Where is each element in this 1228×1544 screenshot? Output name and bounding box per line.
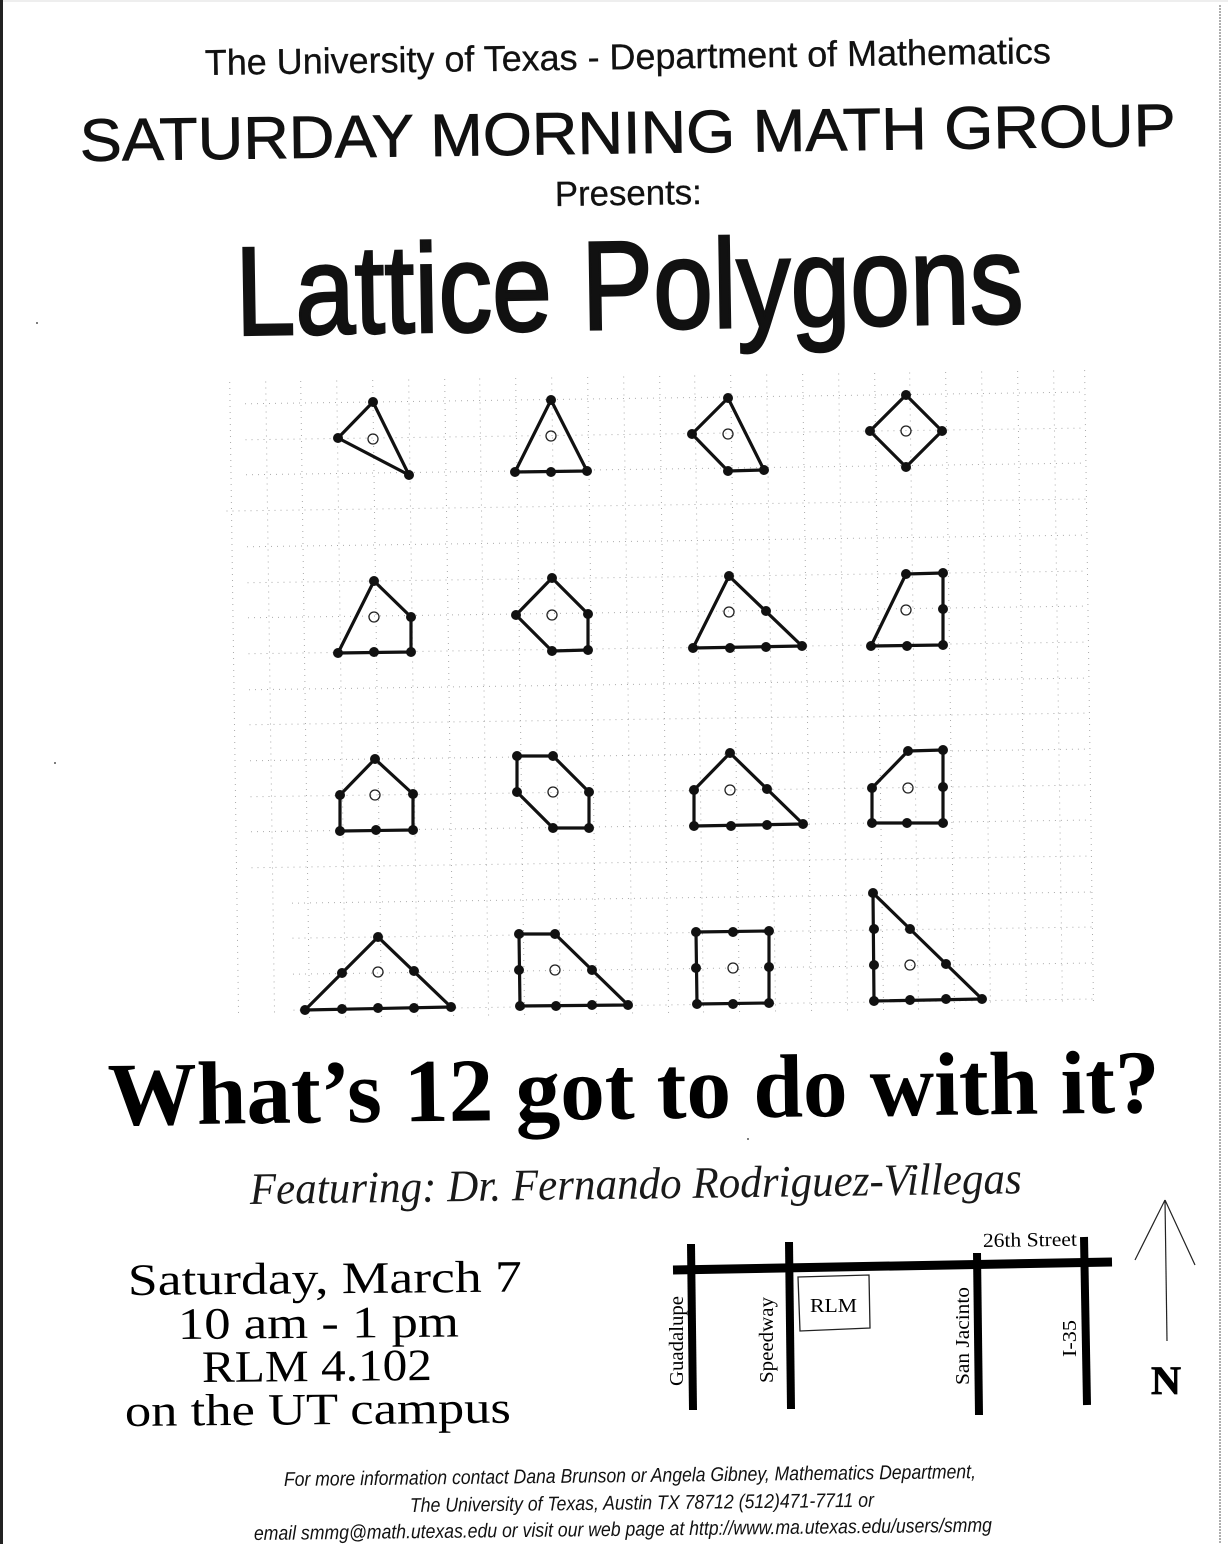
polygon 2 xyxy=(510,395,592,477)
polygon 3 xyxy=(687,393,769,476)
title: Lattice Polygons: Lattice Polygons xyxy=(234,209,1024,362)
label: Guadalupe: Guadalupe xyxy=(666,1296,688,1386)
label: 26th Street: 26th Street xyxy=(983,1229,1078,1252)
polygon 14 xyxy=(514,929,633,1011)
street: San Jacinto xyxy=(977,1253,979,1415)
label: Speedway: Speedway xyxy=(756,1297,778,1383)
label: San Jacinto: San Jacinto xyxy=(952,1287,974,1385)
text: presents: Presents: xyxy=(555,173,702,214)
polygon 16 xyxy=(868,888,987,1006)
polygon 6 xyxy=(511,573,593,656)
street: Guadalupe xyxy=(691,1244,693,1410)
text: featuring speaker: Featuring: Dr. Fernando Rodriguez-Villegas xyxy=(248,1153,1022,1214)
street: I-35 xyxy=(1084,1237,1087,1405)
map: campus streets xyxy=(666,1229,1112,1415)
polygon 8 xyxy=(866,568,948,651)
polygon 15 xyxy=(691,926,774,1009)
polygon 10 xyxy=(512,751,594,833)
header: department: The University of Texas - Department of Mathematics xyxy=(205,30,1051,83)
polygon 11 xyxy=(689,748,808,831)
polygon 1 xyxy=(333,397,414,480)
text block: date, time and place xyxy=(125,1252,522,1436)
arrow: north xyxy=(1135,1200,1195,1341)
footer: contact information: For more information contact Dana Brunson or Angela Gibney, Mathematics Department, xyxy=(284,1461,976,1491)
text block: date, time and place: 10 am - 1 pm xyxy=(178,1297,459,1349)
street: Speedway xyxy=(789,1242,791,1409)
polygon 9 xyxy=(335,754,418,836)
heading: Saturday Morning Math Group: SATURDAY MORNING MATH GROUP xyxy=(79,92,1176,174)
footer: contact information: The University of Texas, Austin TX 78712 (512)471-7711 or xyxy=(410,1490,875,1517)
label: N: N xyxy=(1151,1358,1181,1403)
polygon 7 xyxy=(688,571,807,653)
polygon 12 xyxy=(867,745,948,828)
building: RLM: RLM xyxy=(810,1295,857,1317)
text block: date, time and place: RLM 4.102 xyxy=(202,1340,432,1392)
footer: contact information xyxy=(254,1461,992,1544)
street: 26th Street xyxy=(673,1262,1112,1270)
polygon 4 xyxy=(865,390,947,472)
text block: date, time and place: on the UT campus xyxy=(125,1383,511,1436)
polygon 5 xyxy=(333,576,416,658)
chart: lattice polygon grid xyxy=(225,370,1094,1022)
text block: date, time and place: Saturday, March 7 xyxy=(128,1252,522,1305)
polygon 13 xyxy=(300,932,456,1015)
heading: What's 12 got to do with it?: What’s 12 got to do with it? xyxy=(107,1033,1160,1145)
building: RLM xyxy=(798,1275,870,1331)
label: I-35: I-35 xyxy=(1059,1320,1081,1357)
dotted lattice background xyxy=(225,370,1094,1022)
